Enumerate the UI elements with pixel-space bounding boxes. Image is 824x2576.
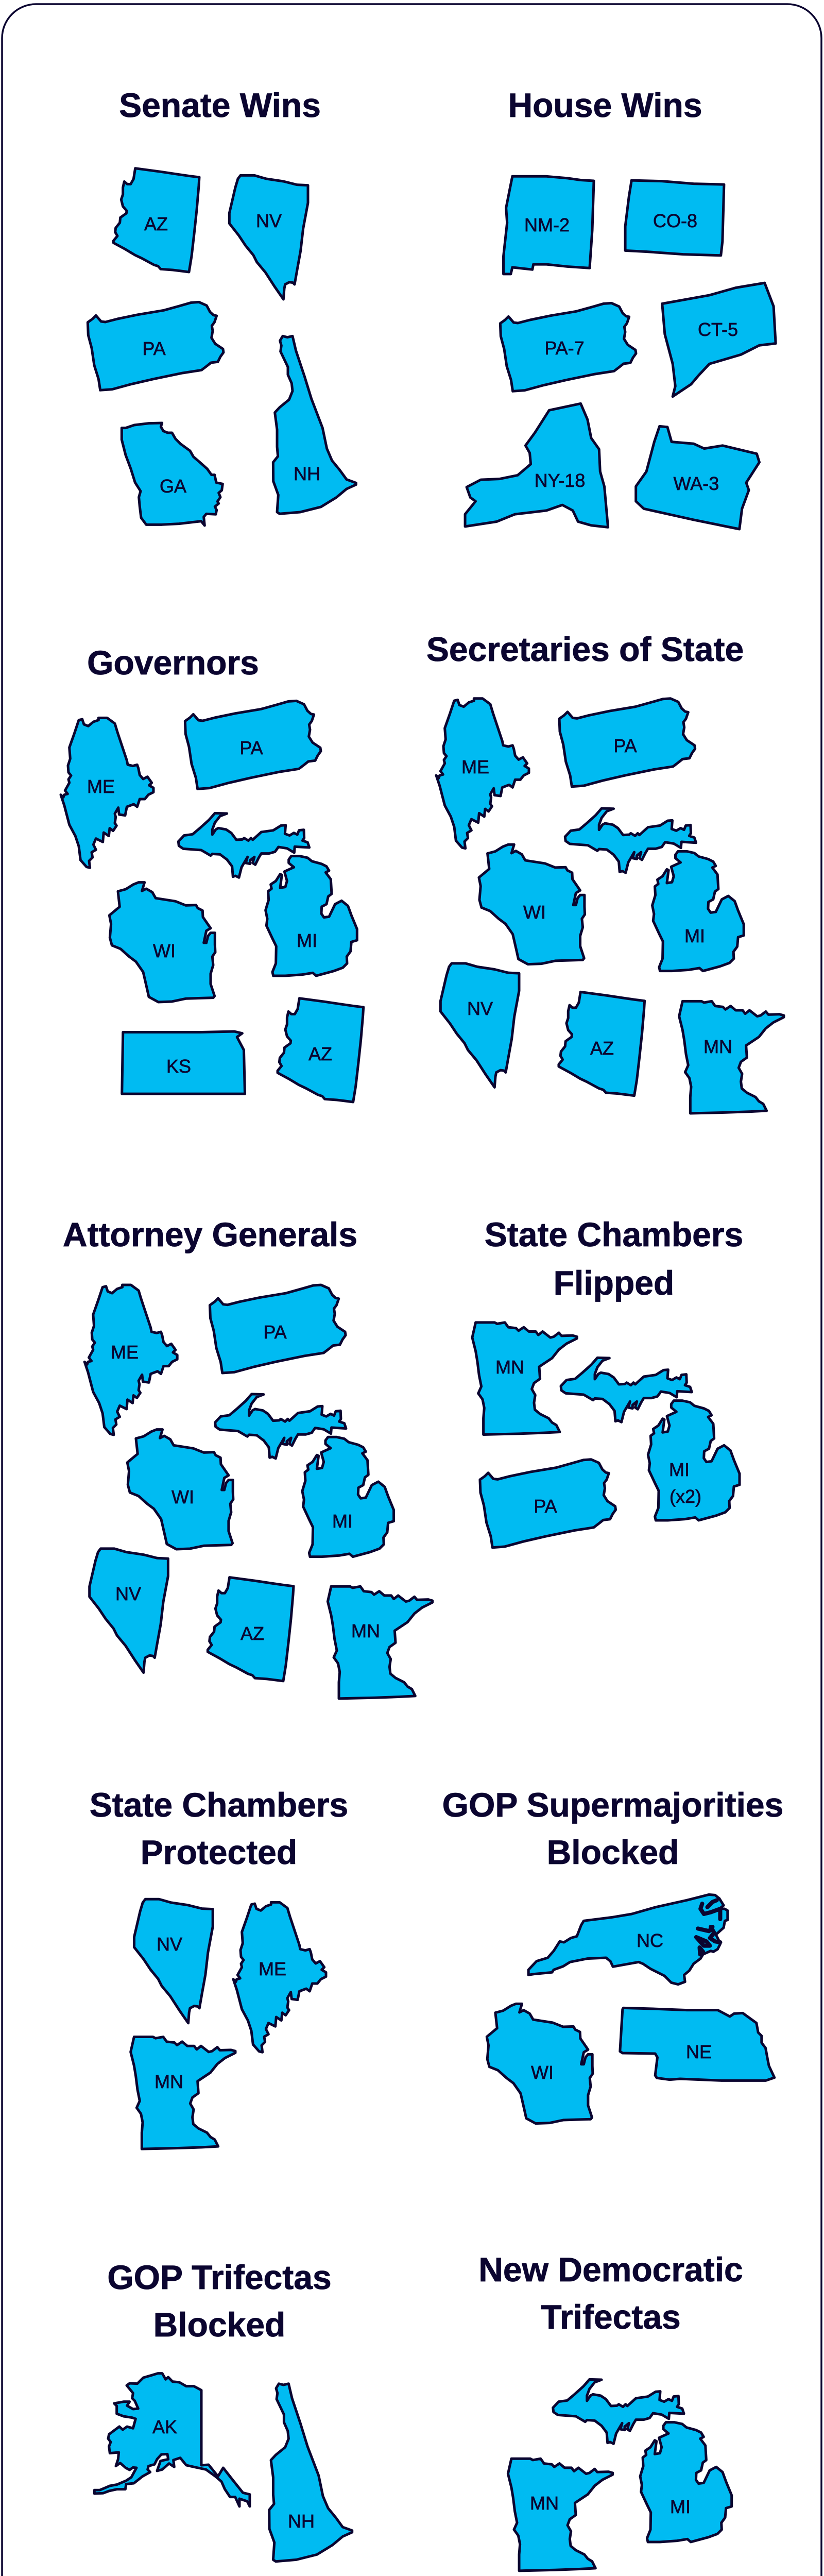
- heading: Attorney Generals: Attorney Generals: [63, 1215, 357, 1253]
- heading: GOP Trifectas Blocked: Blocked: [153, 2306, 285, 2344]
- panel: House Wins: [465, 86, 776, 529]
- state: GA: GA: [160, 476, 186, 497]
- heading: GOP Supermajorities Blocked: GOP Supermajorities: [442, 1786, 783, 1824]
- panel: Governors: [61, 643, 364, 1102]
- state: NV: NV: [467, 998, 493, 1019]
- heading: Secretaries of State: Secretaries of State: [426, 630, 744, 668]
- state: WI: [109, 883, 215, 1002]
- state: PA: PA: [613, 735, 637, 756]
- district: NM-2: NM-2: [524, 214, 570, 235]
- state: AZ: AZ: [144, 213, 168, 234]
- state: NE: [620, 2008, 775, 2080]
- state: MI (x2): (x2): [670, 1486, 701, 1507]
- heading: New Democratic Trifectas: Trifectas: [541, 2298, 681, 2336]
- state: NH: NH: [294, 463, 320, 484]
- state: PA: [185, 701, 321, 789]
- state: ME: ME: [111, 1342, 139, 1363]
- state: GA: [122, 423, 222, 526]
- state: MN: MN: [703, 1036, 732, 1057]
- district: NY-18: [465, 403, 608, 527]
- state: WI: [487, 2004, 593, 2124]
- state: ME: [436, 699, 529, 849]
- district: WA-3: [636, 426, 759, 529]
- state: MI: [553, 2379, 732, 2542]
- state: NV: NV: [157, 1934, 182, 1955]
- state: AZ: AZ: [241, 1623, 264, 1644]
- state: WI: WI: [153, 940, 176, 961]
- state: ME: [84, 1285, 177, 1435]
- district: CT-5: CT-5: [698, 319, 738, 340]
- heading: State Chambers Protected: State Chambers: [90, 1786, 348, 1824]
- state: AZ: [208, 1578, 294, 1681]
- district: NY-18: NY-18: [535, 470, 585, 491]
- district: PA-7: PA-7: [544, 337, 585, 359]
- state: NV: [90, 1549, 168, 1673]
- panel: State Chambers Flipped: [472, 1215, 743, 1548]
- state: AZ: AZ: [590, 1038, 614, 1059]
- panel: Secretaries of State: [426, 630, 784, 1113]
- state: NC: [528, 1894, 728, 1985]
- state: WI: WI: [531, 2062, 554, 2083]
- state: MI: MI: [332, 1511, 353, 1532]
- state: PA: [88, 302, 224, 390]
- state: MI: MI: [297, 930, 317, 951]
- heading: GOP Supermajorities Blocked: Blocked: [547, 1833, 679, 1871]
- heading: House Wins: House Wins: [508, 86, 702, 124]
- state: ME: ME: [259, 1958, 286, 1979]
- panel: New Democratic Trifectas: [478, 2250, 743, 2571]
- state: MN: [472, 1323, 577, 1434]
- panel: GOP Supermajorities Blocked: [442, 1786, 783, 2124]
- panel: GOP Trifectas Blocked: [94, 2258, 352, 2562]
- district: CO-8: [625, 180, 724, 256]
- state: MN: [328, 1586, 433, 1699]
- heading: GOP Trifectas Blocked: GOP Trifectas: [107, 2258, 332, 2296]
- state: MN: MN: [530, 2493, 559, 2514]
- state: MI: [215, 1394, 394, 1557]
- state: NV: [134, 1899, 213, 2023]
- state: MI: MI: [684, 925, 705, 946]
- state: NE: NE: [686, 2041, 712, 2062]
- state: MN: [131, 2037, 235, 2149]
- district: CT-5: [662, 283, 776, 397]
- district: WA-3: WA-3: [674, 473, 719, 494]
- state: PA: [559, 699, 695, 787]
- state: AZ: [559, 992, 645, 1096]
- state: AZ: AZ: [308, 1043, 332, 1064]
- state: WI: WI: [171, 1486, 194, 1507]
- heading: State Chambers Flipped: State Chambers: [485, 1215, 743, 1253]
- state: WI: WI: [523, 902, 546, 923]
- state: AZ: [278, 998, 364, 1102]
- panel: Senate Wins: [88, 86, 356, 526]
- state: NV: [440, 963, 519, 1087]
- state: PA: [210, 1285, 346, 1373]
- state: NH: [269, 2384, 352, 2562]
- state: NC: NC: [637, 1930, 663, 1951]
- state: PA: PA: [534, 1496, 557, 1517]
- heading: State Chambers Flipped: Flipped: [554, 1264, 674, 1302]
- heading: State Chambers Protected: Protected: [141, 1833, 297, 1871]
- state: MN: [679, 1001, 784, 1113]
- state: AK: [94, 2374, 250, 2506]
- state: MI (x2): MI: [669, 1459, 690, 1480]
- state: KS: KS: [166, 1056, 191, 1077]
- heading: New Democratic Trifectas: New Democratic: [478, 2250, 743, 2289]
- state: WI: [479, 844, 585, 964]
- state: KS: [122, 1031, 245, 1094]
- state: MN: MN: [351, 1620, 380, 1641]
- state: WI: [127, 1430, 233, 1549]
- state: NV: NV: [256, 210, 282, 231]
- state: AZ: [113, 168, 199, 272]
- state: ME: ME: [87, 776, 115, 797]
- state: NV: [229, 175, 308, 299]
- state: MI (x2): [561, 1358, 740, 1520]
- state: PA: [480, 1460, 616, 1548]
- state: AK: AK: [152, 2416, 177, 2437]
- state: ME: [233, 1902, 326, 2052]
- state: MN: [508, 2459, 613, 2571]
- panel: State Chambers Protected: [90, 1786, 348, 2149]
- state: ME: ME: [461, 756, 489, 777]
- state: MI: [178, 813, 357, 976]
- state: MN: MN: [154, 2071, 183, 2092]
- state: MI: MI: [670, 2496, 691, 2517]
- state: PA: PA: [142, 338, 166, 359]
- state: MI: [565, 808, 744, 971]
- state: ME: [61, 718, 153, 868]
- state: NV: NV: [115, 1583, 141, 1604]
- district: CO-8: CO-8: [653, 210, 697, 231]
- state: NH: NH: [288, 2511, 315, 2532]
- panel: Attorney Generals: [63, 1215, 433, 1699]
- district: PA-7: [500, 303, 636, 391]
- heading: Senate Wins: Senate Wins: [119, 86, 321, 124]
- state: MN: MN: [495, 1357, 524, 1378]
- state: NH: [273, 336, 356, 514]
- heading: Governors: Governors: [87, 643, 259, 682]
- district: NM-2: [504, 176, 594, 274]
- state: PA: PA: [263, 1321, 287, 1343]
- state: PA: PA: [239, 737, 263, 758]
